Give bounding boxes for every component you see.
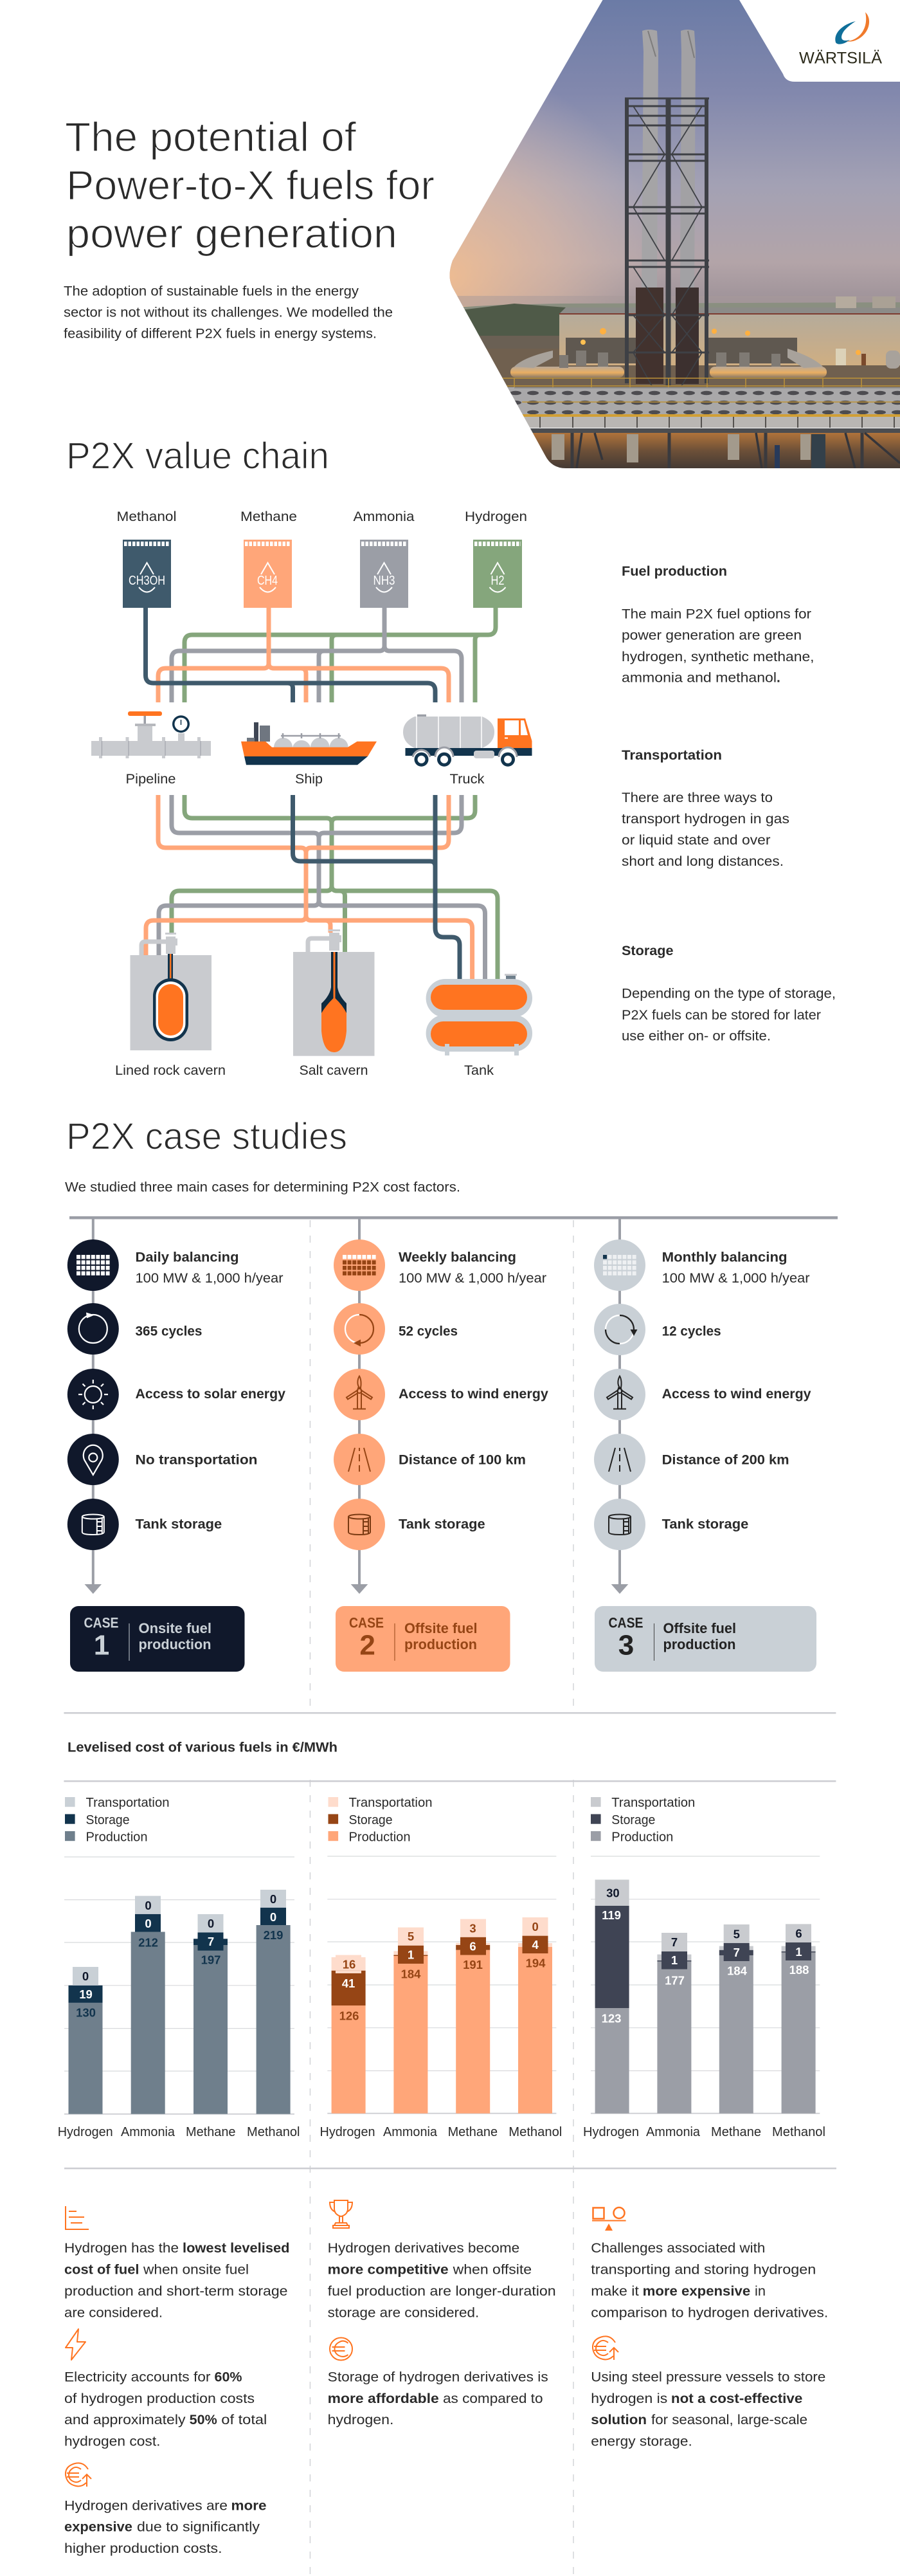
finding: derivatives more competitive xyxy=(328,2241,556,2321)
building xyxy=(559,297,900,365)
title: The potential of xyxy=(65,114,356,160)
finding: steel vessels: for seasonal, large-scale xyxy=(651,2413,807,2427)
step: tank storage xyxy=(68,1499,222,1550)
category labels: Methanol xyxy=(247,2125,300,2139)
transport labels: Truck xyxy=(450,772,485,787)
intro text: feasibility of different P2X fuels in energy systems. xyxy=(64,327,377,341)
text block: fuel production: power generation are green xyxy=(622,628,802,643)
category labels xyxy=(58,2125,300,2139)
category labels: Methanol xyxy=(509,2125,562,2139)
category labels: Hydrogen xyxy=(583,2125,639,2139)
finding: storage more affordable: more affordable xyxy=(328,2391,439,2406)
bar: methanol xyxy=(782,1924,816,2114)
step: wind energy xyxy=(334,1369,548,1420)
finding: steel vessels: Using steel pressure vessels to store xyxy=(591,2370,825,2385)
finding: electricity share: Electricity accounts for xyxy=(64,2370,211,2385)
railing xyxy=(501,378,900,387)
bar: methane: 7 xyxy=(734,1946,740,1959)
icon: lined rock cavern xyxy=(130,933,212,1050)
bar: methanol: 0 xyxy=(270,1910,276,1924)
finding: lowest levelised cost: production and short-term storage xyxy=(64,2284,288,2299)
case 1 label: CASE xyxy=(84,1615,118,1631)
dark lower stacks xyxy=(636,288,699,384)
finding: steel vessels: not a cost-effective xyxy=(671,2391,802,2406)
text block: storage: P2X fuels can be stored for later xyxy=(622,1008,821,1023)
icon: euro xyxy=(330,2337,352,2361)
finding: challenges of hydrogen: more expensive xyxy=(643,2284,750,2299)
step: solar energy: Access to solar energy xyxy=(135,1387,285,1402)
transport labels: Pipeline xyxy=(126,772,176,787)
case 3 label: 3 xyxy=(618,1630,634,1661)
fuel box: methane: CH4 xyxy=(257,574,278,588)
case 2 column xyxy=(334,1219,548,1594)
storage labels: Salt cavern xyxy=(300,1063,368,1078)
bar: ammonia: 1 xyxy=(408,1948,414,1962)
bar: ammonia: 1 xyxy=(671,1953,678,1967)
case 2 label xyxy=(336,1606,510,1672)
finding: challenges of hydrogen: in xyxy=(755,2284,766,2299)
step: tank storage: Tank storage xyxy=(662,1517,748,1532)
legend: case 1: Production xyxy=(86,1831,148,1845)
bar: methane: 184 xyxy=(727,1964,748,1977)
steel tower xyxy=(625,98,709,386)
bar: hydrogen xyxy=(68,1967,103,2114)
fuel box: methane xyxy=(244,540,292,608)
finding: steel vessels: solution xyxy=(591,2413,647,2427)
finding: electricity share: and approximately xyxy=(64,2413,186,2427)
title: power generation xyxy=(66,210,397,257)
category labels: Hydrogen xyxy=(58,2125,113,2139)
bar: methanol xyxy=(518,1917,552,2114)
step: distance of 100 km: Distance of 100 km xyxy=(399,1453,526,1468)
bar: hydrogen: 123 xyxy=(602,2012,621,2025)
finding: electricity share xyxy=(64,2370,267,2449)
bar: methanol: 4 xyxy=(532,1938,539,1951)
icon: lightning xyxy=(66,2329,86,2360)
fuel box: hydrogen xyxy=(473,540,522,608)
fuel box: hydrogen: H2 xyxy=(491,574,504,588)
icon: bar list xyxy=(66,2206,89,2229)
icon: pipeline xyxy=(91,711,211,758)
step: monthly balancing: 100 MW & 1,000 h/year xyxy=(662,1271,810,1286)
bar: hydrogen: 126 xyxy=(339,2009,359,2022)
text block: transportation: or liquid state and over xyxy=(622,833,770,848)
step: tank storage xyxy=(594,1499,748,1550)
logo: Wärtsilä xyxy=(799,12,882,67)
category labels: Hydrogen xyxy=(320,2125,375,2139)
text block: fuel production: ammonia and methanol xyxy=(622,670,777,686)
finding: derivatives more competitive: fuel production are longer-duration xyxy=(328,2284,556,2299)
text block: storage xyxy=(622,944,836,1044)
step: no transportation xyxy=(68,1434,258,1485)
pipes: production to transport xyxy=(145,608,496,702)
legend: case 2 xyxy=(328,1796,432,1845)
finding: lowest levelised cost: when onsite fuel xyxy=(143,2263,249,2278)
fuel box: ammonia xyxy=(360,540,408,608)
bar: ammonia: 177 xyxy=(665,1973,685,1987)
intro text: sector is not without its challenges. We modelled the xyxy=(64,305,393,320)
bar: methane: 191 xyxy=(463,1958,483,1971)
case 3 column xyxy=(594,1219,811,1594)
icon: euro rising xyxy=(593,2336,618,2360)
bar: ammonia: 7 xyxy=(671,1935,678,1949)
bar: methanol: 194 xyxy=(526,1957,546,1969)
case 1 label: Onsite fuel xyxy=(139,1620,212,1636)
bar: ammonia xyxy=(393,1928,428,2114)
step: distance of 100 km xyxy=(334,1434,526,1485)
finding: derivatives more competitive: when offsite xyxy=(453,2263,532,2278)
logo: Wärtsilä: WÄRTSILÄ xyxy=(799,49,882,67)
pipes: transport to storage xyxy=(146,795,498,979)
step: 365 cycles xyxy=(68,1303,202,1355)
icon: euro rising xyxy=(66,2463,91,2487)
case 2 label: Offsite fuel xyxy=(404,1620,477,1636)
finding: storage more affordable: Storage of hydrogen derivatives is xyxy=(328,2370,548,2385)
legend: case 3: Transportation xyxy=(611,1796,695,1810)
step: wind energy: Access to wind energy xyxy=(399,1387,548,1402)
chart: case 1 xyxy=(58,1857,300,2139)
legend: case 2: Storage xyxy=(348,1813,392,1827)
photo: power plant at dusk xyxy=(444,0,900,468)
finding: storage more affordable: hydrogen. xyxy=(328,2413,393,2427)
intro text: The adoption of sustainable fuels in the energy xyxy=(64,284,359,298)
case 2 label: production xyxy=(404,1636,477,1652)
legend: case 2: Transportation xyxy=(348,1796,432,1810)
step: distance of 200 km: Distance of 200 km xyxy=(662,1453,789,1468)
bar: methanol: 0 xyxy=(532,1920,539,1933)
bar: methane: 7 xyxy=(208,1935,214,1948)
finding: steel vessels: hydrogen is xyxy=(591,2391,667,2406)
icon: salt cavern xyxy=(293,929,374,1056)
icon: tank storage vessels xyxy=(426,974,532,1055)
bar: hydrogen: 41 xyxy=(342,1977,355,1990)
icon: balance scale xyxy=(592,2207,626,2231)
category labels: Methane xyxy=(186,2125,235,2139)
storage labels xyxy=(115,1063,494,1078)
icon: ship xyxy=(241,722,377,765)
finding: derivatives more expensive: more xyxy=(231,2499,266,2514)
step: 12 cycles: 12 cycles xyxy=(662,1324,721,1339)
bar: hydrogen: 19 xyxy=(79,1987,93,2001)
step: weekly balancing: 100 MW & 1,000 h/year xyxy=(399,1271,546,1286)
case 1 column xyxy=(68,1219,285,1594)
legend: case 3 xyxy=(591,1796,695,1845)
bar: hydrogen: 130 xyxy=(76,2005,96,2020)
step: daily balancing: Daily balancing xyxy=(135,1250,239,1265)
case 1 label: production xyxy=(139,1636,211,1652)
text block: fuel production: hydrogen, synthetic methane, xyxy=(622,650,814,664)
finding: electricity share: of total xyxy=(221,2413,267,2427)
step: wind energy: Access to wind energy xyxy=(662,1387,811,1402)
text block: storage: Depending on the type of storage, xyxy=(622,987,836,1001)
chart heading: Levelised cost of various fuels in €/MWh xyxy=(68,1740,338,1755)
finding: lowest levelised cost: lowest levelised xyxy=(183,2241,289,2256)
step: tank storage: Tank storage xyxy=(135,1517,222,1532)
fuel box: ammonia: NH3 xyxy=(373,574,395,588)
bar: methanol: 1 xyxy=(795,1945,802,1959)
icon: trophy xyxy=(330,2200,352,2228)
step: 12 cycles xyxy=(594,1304,721,1355)
bar: ammonia xyxy=(657,1933,691,2114)
bar: hydrogen: 0 xyxy=(82,1969,89,1983)
bar: ammonia xyxy=(131,1896,165,2114)
step: monthly balancing xyxy=(594,1239,810,1291)
finding: challenges of hydrogen: make it xyxy=(591,2284,639,2299)
category labels: Methane xyxy=(711,2125,761,2139)
bar: methanol: 0 xyxy=(270,1892,276,1906)
case 3 label xyxy=(595,1606,816,1672)
bar: methane xyxy=(194,1914,228,2114)
finding: storage more affordable: as compared to xyxy=(443,2391,543,2406)
storage labels: Lined rock cavern xyxy=(115,1063,226,1078)
transport labels: Ship xyxy=(295,772,323,787)
bar: methane xyxy=(719,1924,753,2114)
text block: fuel production: . xyxy=(777,670,780,686)
step: no transportation: No transportation xyxy=(135,1453,257,1468)
finding: lowest levelised cost: Hydrogen has the xyxy=(64,2241,179,2256)
text block: storage: Storage xyxy=(622,944,674,958)
finding: electricity share: 50% xyxy=(190,2413,217,2427)
case 3 label: Offsite fuel xyxy=(663,1620,736,1636)
step: 52 cycles xyxy=(334,1303,458,1355)
finding: electricity share: of hydrogen production costs xyxy=(64,2391,255,2406)
transport labels xyxy=(126,772,485,787)
fuel box: methanol xyxy=(123,540,171,608)
bar: hydrogen: 119 xyxy=(602,1908,621,1922)
case 2 label: CASE xyxy=(349,1615,384,1631)
finding: lowest levelised cost xyxy=(64,2241,289,2321)
bar: methane: 197 xyxy=(201,1953,221,1967)
chart: case 3 xyxy=(583,1856,825,2139)
category labels: Ammonia xyxy=(383,2125,438,2139)
equipment and glowing pipes xyxy=(510,328,900,378)
step: 365 cycles: 365 cycles xyxy=(135,1324,202,1339)
finding: derivatives more competitive: Hydrogen derivatives become xyxy=(328,2241,519,2256)
step: monthly balancing: Monthly balancing xyxy=(662,1250,788,1265)
category labels: Ammonia xyxy=(646,2125,701,2139)
step: daily balancing xyxy=(68,1239,284,1291)
text block: transportation: short and long distances. xyxy=(622,854,784,869)
storage labels: Tank xyxy=(464,1063,494,1078)
icon: truck xyxy=(403,715,532,767)
text block: storage: use either on- or offsite. xyxy=(622,1029,771,1044)
finding: lowest levelised cost: are considered. xyxy=(64,2306,163,2321)
bar: hydrogen: 16 xyxy=(343,1958,356,1971)
finding: steel vessels xyxy=(591,2370,825,2449)
title: Power-to-X fuels for xyxy=(66,162,435,208)
bar: ammonia: 212 xyxy=(138,1936,158,1949)
legend: case 1 xyxy=(65,1796,170,1845)
finding: challenges of hydrogen: Challenges associated with xyxy=(591,2241,765,2256)
bar: methane: 3 xyxy=(469,1921,476,1935)
fuel labels: Methane xyxy=(240,509,297,524)
ground and supports xyxy=(501,428,900,468)
finding: challenges of hydrogen: transporting and storing hydrogen xyxy=(591,2263,816,2278)
finding: derivatives more expensive: Hydrogen derivatives are xyxy=(64,2499,228,2514)
finding: derivatives more expensive: expensive xyxy=(64,2520,132,2535)
finding: derivatives more expensive: higher production costs. xyxy=(64,2541,222,2556)
fuel labels: Methanol xyxy=(117,509,176,524)
cooling fan deck xyxy=(501,387,900,428)
step: wind energy xyxy=(594,1369,811,1420)
legend: case 1: Storage xyxy=(86,1813,130,1827)
text block: transportation xyxy=(622,748,789,869)
heading: P2X value chain: P2X value chain xyxy=(66,435,329,477)
finding: derivatives more expensive: due to significantly xyxy=(137,2520,260,2535)
step: distance of 200 km xyxy=(594,1434,789,1485)
bar: methanol: 188 xyxy=(789,1963,809,1977)
fuel labels xyxy=(117,509,527,524)
legend: case 3: Storage xyxy=(611,1813,655,1827)
fuel labels: Hydrogen xyxy=(465,509,527,524)
finding: lowest levelised cost: cost of fuel xyxy=(64,2263,139,2278)
case 3 label: production xyxy=(663,1636,735,1652)
bar: ammonia: 0 xyxy=(145,1899,152,1912)
bar: ammonia: 5 xyxy=(408,1930,414,1943)
finding: electricity share: 60% xyxy=(215,2370,242,2385)
bar: methane: 0 xyxy=(208,1917,214,1930)
text block: transportation: There are three ways to xyxy=(622,790,773,805)
step: tank storage: Tank storage xyxy=(399,1517,485,1532)
bar: methanol: 6 xyxy=(795,1927,802,1940)
fuel labels: Ammonia xyxy=(354,509,415,524)
bar: methanol xyxy=(256,1890,291,2114)
bar: ammonia: 184 xyxy=(401,1967,421,1981)
step: 52 cycles: 52 cycles xyxy=(399,1324,458,1339)
bar: methanol: 219 xyxy=(264,1928,283,1942)
case studies intro: We studied three main cases for determining P2X cost factors. xyxy=(65,1180,460,1195)
case 2 label: 2 xyxy=(359,1630,375,1661)
text block: fuel production: The main P2X fuel options for xyxy=(622,607,811,621)
legend: case 3: Production xyxy=(611,1831,673,1845)
intro text xyxy=(64,284,393,341)
fuel box: methanol: CH3OH xyxy=(129,574,165,588)
bar: hydrogen: 30 xyxy=(606,1886,620,1900)
finding: derivatives more expensive xyxy=(64,2499,266,2556)
step: weekly balancing: Weekly balancing xyxy=(399,1250,516,1265)
finding: derivatives more competitive: more competitive xyxy=(328,2263,449,2278)
text block: transportation: transport hydrogen in gas xyxy=(622,812,789,827)
finding: steel vessels: energy storage. xyxy=(591,2434,692,2449)
heading: P2X case studies: P2X case studies xyxy=(66,1116,347,1158)
category labels xyxy=(583,2125,825,2139)
case 1 label xyxy=(70,1606,244,1672)
bar: hydrogen xyxy=(595,1879,629,2114)
bar: hydrogen xyxy=(332,1955,366,2114)
category labels xyxy=(320,2125,562,2139)
finding: derivatives more competitive: storage are considered. xyxy=(328,2306,479,2321)
bar: methane xyxy=(456,1919,490,2114)
legend: case 2: Production xyxy=(348,1831,410,1845)
chart: case 2 xyxy=(320,1856,562,2139)
bar: ammonia: 0 xyxy=(145,1917,152,1930)
finding: electricity share: hydrogen cost. xyxy=(64,2434,161,2449)
finding: storage more affordable xyxy=(328,2370,548,2427)
case 1 label: 1 xyxy=(94,1630,109,1661)
bar: methane: 5 xyxy=(734,1927,740,1941)
step: tank storage xyxy=(334,1499,485,1550)
title xyxy=(65,114,435,257)
step: solar energy xyxy=(68,1369,285,1420)
legend: case 1: Transportation xyxy=(86,1796,170,1810)
finding: challenges of hydrogen: comparison to hydrogen derivatives. xyxy=(591,2306,828,2321)
category labels: Methane xyxy=(448,2125,498,2139)
case 3 label: CASE xyxy=(608,1615,643,1631)
category labels: Ammonia xyxy=(121,2125,176,2139)
finding: challenges of hydrogen xyxy=(591,2241,828,2321)
text block: fuel production: Fuel production xyxy=(622,564,727,579)
text block: transportation: Transportation xyxy=(622,748,722,763)
twin stacks xyxy=(642,30,696,288)
category labels: Methanol xyxy=(772,2125,825,2139)
bar: methane: 6 xyxy=(469,1940,476,1953)
step: daily balancing: 100 MW & 1,000 h/year xyxy=(135,1271,283,1286)
step: weekly balancing xyxy=(334,1239,546,1291)
text block: fuel production xyxy=(622,564,814,686)
